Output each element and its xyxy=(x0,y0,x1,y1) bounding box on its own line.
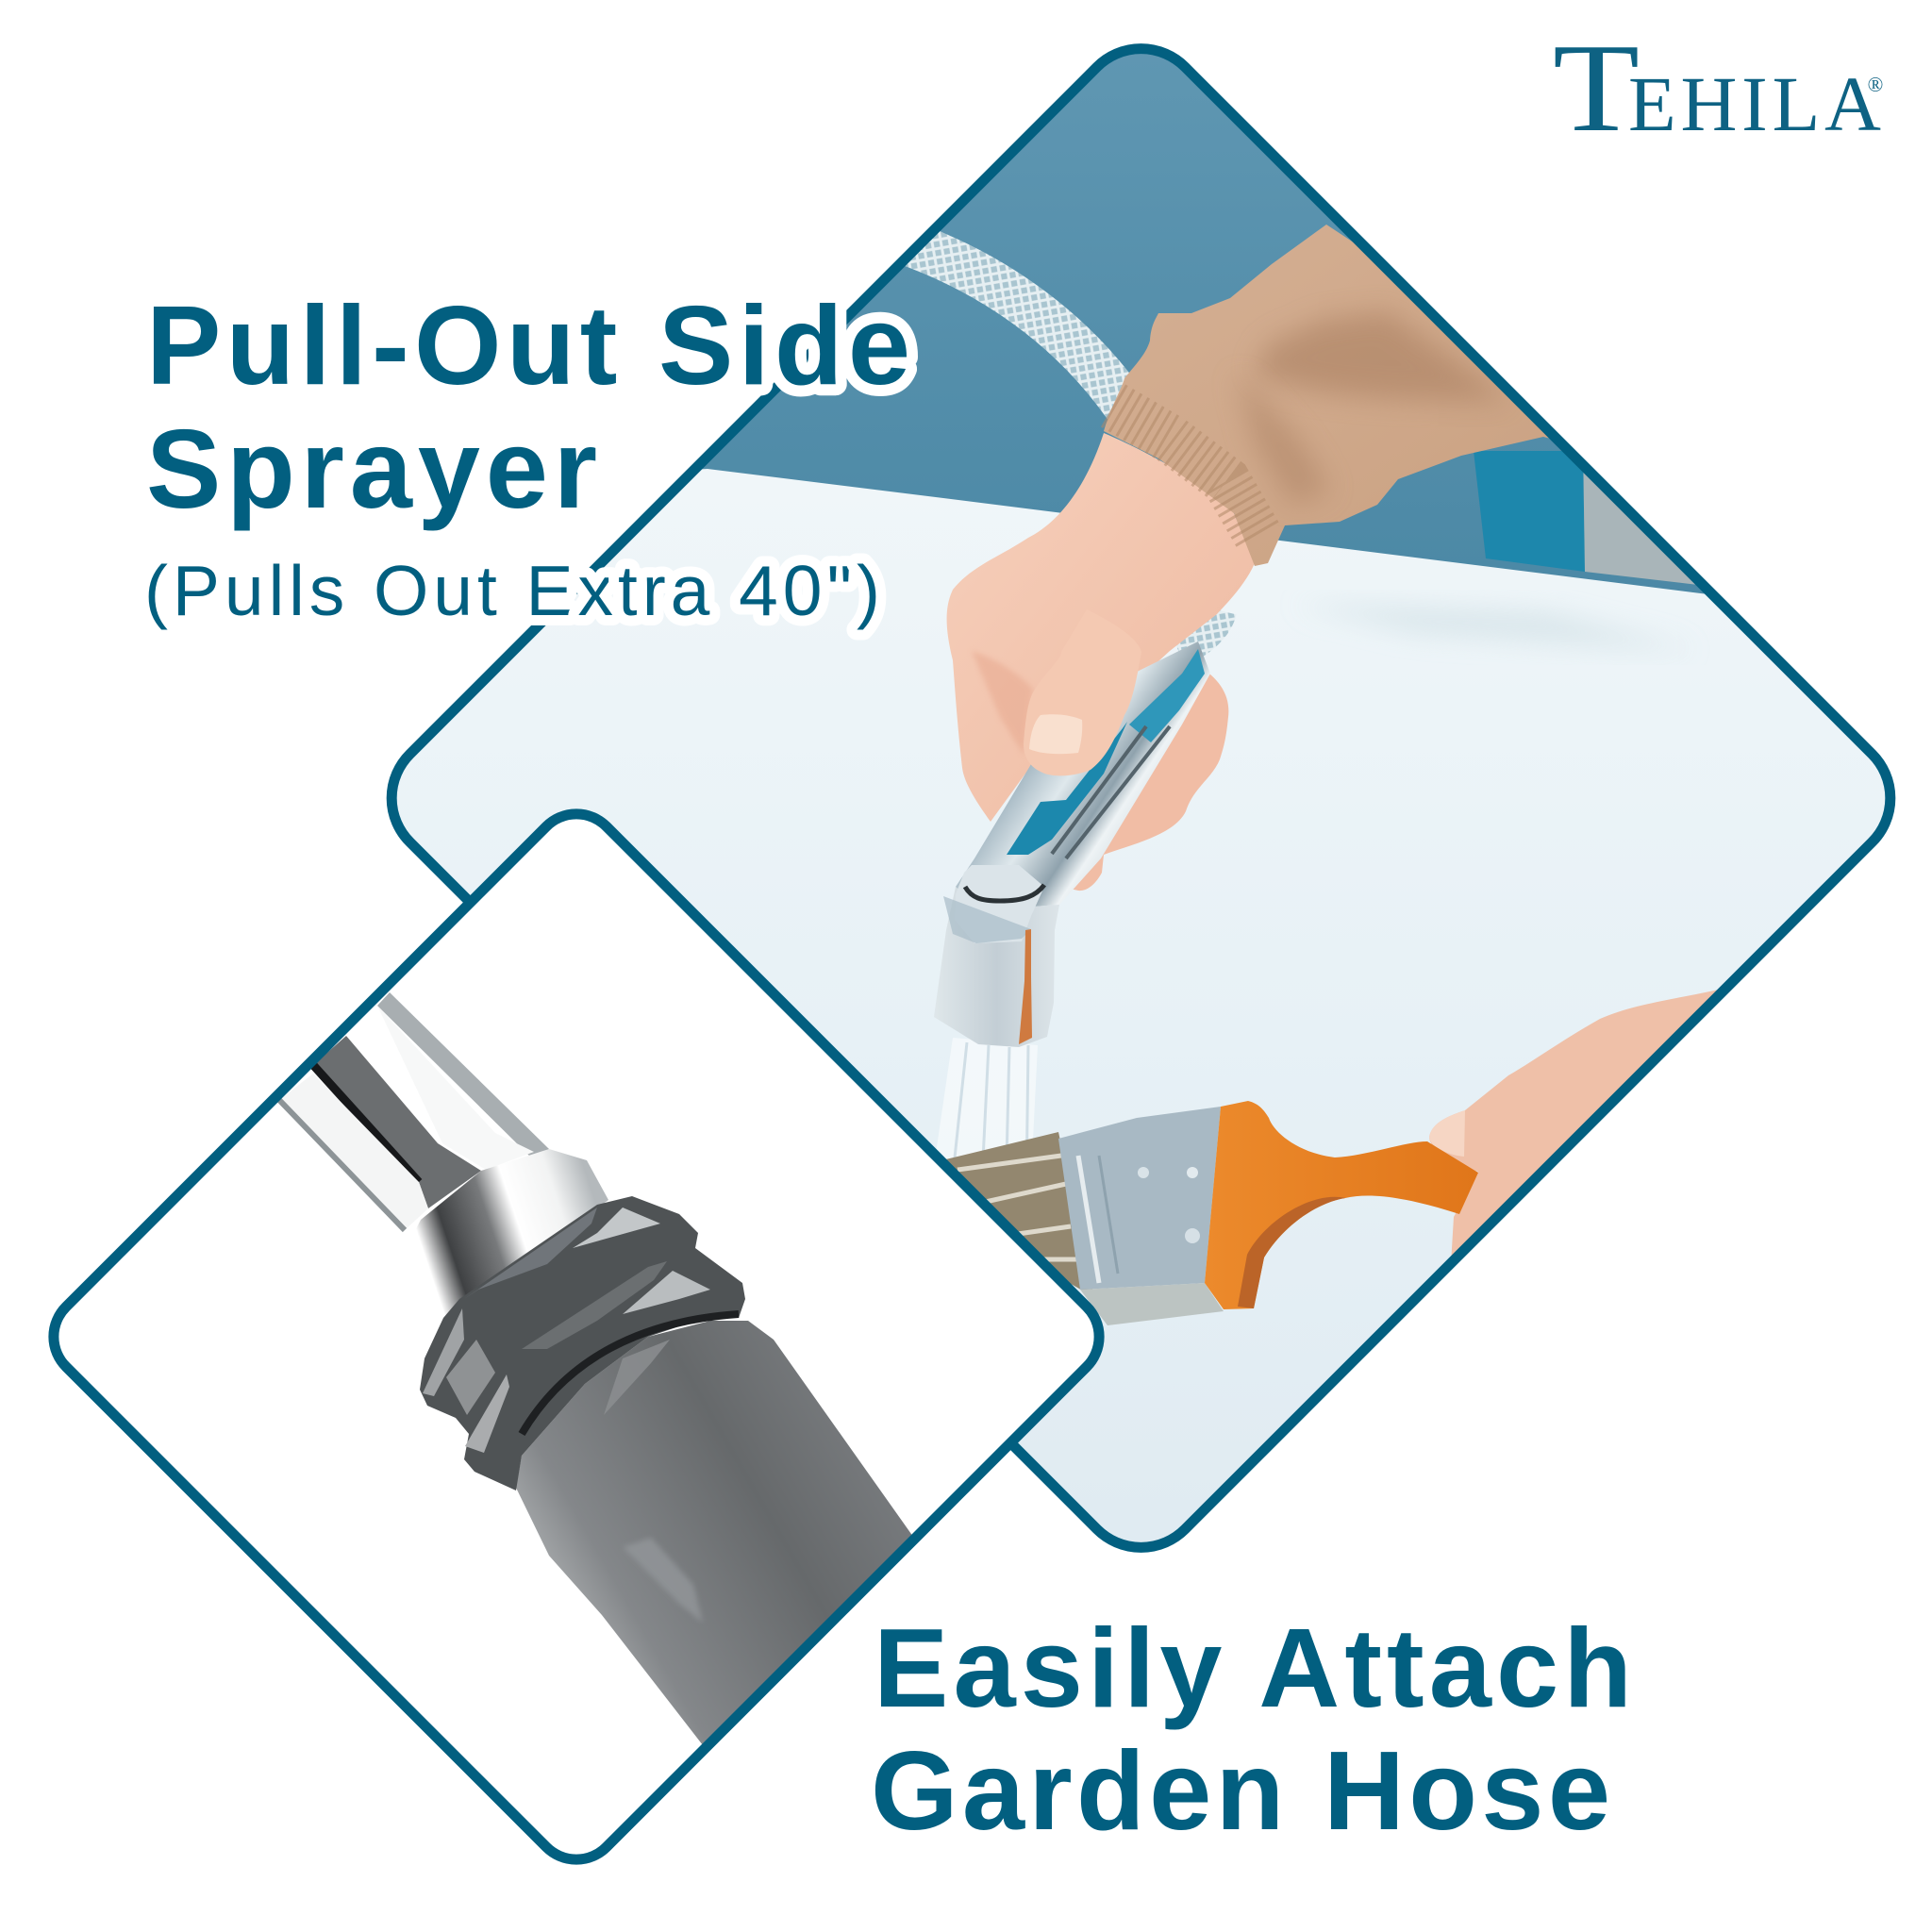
orange reflection xyxy=(1019,929,1032,1044)
logo: Tehila: EHILA xyxy=(1628,60,1881,147)
hose worn patch xyxy=(623,1538,703,1623)
heading: Pull-Out Side Sprayer: Pull-Out Side xyxy=(146,283,910,408)
thumbnail on right hand xyxy=(1429,1110,1465,1157)
pipe top white band xyxy=(377,1006,534,1155)
lower nut facet xyxy=(522,1261,667,1349)
light facet right of upper nut xyxy=(573,1208,660,1248)
nut base xyxy=(420,1196,745,1491)
panel: sprayer photo diamond xyxy=(387,43,1896,1553)
chrome threaded collar xyxy=(417,1149,608,1315)
chrome sprayer xyxy=(934,641,1210,1047)
heading: Easily Attach Garden Hose: Easily Attach xyxy=(874,1606,1632,1731)
upper nut facet xyxy=(464,1208,597,1299)
spout head cap xyxy=(955,865,1044,943)
fingers behind sprayer xyxy=(1074,674,1228,891)
pipe dark stripe xyxy=(313,1036,481,1208)
light facet right of lower nut xyxy=(623,1271,710,1314)
lower fold shadow xyxy=(1241,392,1324,502)
pipe lower white band xyxy=(279,1074,428,1230)
heading: Easily Attach Garden Hose xyxy=(871,1606,1632,1854)
sink basin xyxy=(396,469,1885,1542)
orange handle xyxy=(1205,1101,1478,1309)
hose highlight xyxy=(604,1340,670,1415)
right hand holding brush xyxy=(1429,990,1717,1256)
bristles xyxy=(946,1132,1092,1290)
logo: Tehila: T xyxy=(1553,18,1640,158)
blue reflections xyxy=(1007,722,1127,855)
logo: Tehila: ® xyxy=(1868,73,1883,96)
white diamond fill xyxy=(36,796,1117,1877)
wall background xyxy=(702,54,1705,594)
sink rim shadow xyxy=(1357,604,1627,647)
thumbnail xyxy=(1029,714,1082,754)
paint brush xyxy=(934,1101,1478,1325)
subheading: pulls out extra 40 inches: (Pulls Out Extra 40") xyxy=(144,551,880,630)
thumb xyxy=(1024,672,1138,775)
sleeve fold shadow xyxy=(1255,311,1509,401)
lit middle band xyxy=(446,1340,495,1415)
left hand palm and wrist xyxy=(947,433,1255,822)
heading: Pull-Out Side Sprayer xyxy=(146,283,910,532)
spout groove xyxy=(965,885,1044,901)
black o-ring xyxy=(522,1314,739,1434)
pipe top rim xyxy=(377,992,549,1160)
hand shadow fold xyxy=(972,651,1033,755)
tan sweater sleeve xyxy=(1101,225,1549,566)
heading: Pull-Out Side Sprayer: Sprayer xyxy=(146,407,597,532)
sprayer body xyxy=(956,641,1210,910)
water spray xyxy=(937,1038,1038,1158)
ribbed cuff xyxy=(1113,406,1259,538)
grey pipe at right xyxy=(1583,473,1696,585)
left light facets xyxy=(423,1308,464,1396)
small diamond outline xyxy=(36,796,1117,1877)
sprayer dark edge lines xyxy=(1052,726,1170,858)
dark hex nut xyxy=(420,1196,745,1491)
grey hose adapter xyxy=(516,1321,934,1764)
panel: garden hose connector diamond xyxy=(36,796,1117,1877)
sprayer spout xyxy=(934,887,1059,1047)
chrome pipe xyxy=(279,992,549,1230)
big diamond outline xyxy=(366,23,1916,1574)
heading: Easily Attach Garden Hose: Garden Hose xyxy=(871,1728,1610,1854)
logo: Tehila xyxy=(1553,18,1883,158)
braided hose xyxy=(887,236,1223,653)
blue strip behind sink xyxy=(1474,451,1585,572)
ferrule xyxy=(1058,1107,1221,1290)
